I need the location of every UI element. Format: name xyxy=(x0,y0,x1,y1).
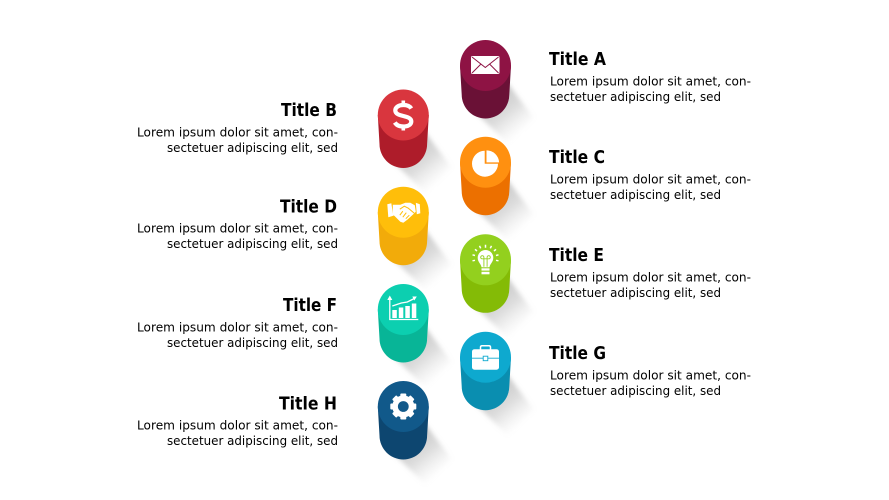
cylinder E: light bulb xyxy=(460,234,534,338)
text block: Title F: sectetuer adipiscing elit, sed xyxy=(167,336,338,351)
icon: pie chart xyxy=(472,150,499,177)
icon: dollar sign xyxy=(395,100,411,130)
icon: handshake xyxy=(387,203,420,223)
text block: Title A xyxy=(549,50,751,105)
text block: Title A: Lorem ipsum dolor sit amet, con- xyxy=(550,74,751,90)
text block: Title D: Lorem ipsum dolor sit amet, con- xyxy=(137,222,338,236)
icon: gear xyxy=(390,394,416,420)
text block: Title H: Title H xyxy=(279,394,337,414)
text block: Title C: sectetuer adipiscing elit, sed xyxy=(550,188,721,203)
text block: Title E xyxy=(549,246,751,301)
text block: Title C xyxy=(549,148,751,203)
text block: Title C: Title C xyxy=(549,148,605,168)
text block: Title E: Title E xyxy=(549,246,604,266)
text block: Title G xyxy=(549,344,751,399)
icon: light bulb xyxy=(472,245,498,274)
text block: Title B: sectetuer adipiscing elit, sed xyxy=(167,141,338,156)
cylinder A: envelope xyxy=(460,40,534,144)
cylinder B: dollar xyxy=(378,90,451,193)
text block: Title F: Title F xyxy=(283,296,337,316)
text block: Title H: sectetuer adipiscing elit, sed xyxy=(167,434,338,449)
text block: Title H xyxy=(137,394,338,449)
icon: growth chart xyxy=(387,296,418,320)
text block: Title G: Title G xyxy=(549,344,606,364)
text block: Title F xyxy=(137,296,338,351)
text block: Title C: Lorem ipsum dolor sit amet, con- xyxy=(550,172,751,188)
icon: envelope xyxy=(471,56,500,74)
text block: Title D xyxy=(137,198,338,252)
cylinder C: pie chart xyxy=(460,137,534,240)
text block: Title B: Title B xyxy=(281,101,337,121)
text block: Title A: sectetuer adipiscing elit, sed xyxy=(550,90,721,105)
cylinder F: bar chart xyxy=(378,284,451,388)
text block: Title A: Title A xyxy=(549,50,606,70)
cylinder H: gear xyxy=(378,381,451,484)
text block: Title B: Lorem ipsum dolor sit amet, con- xyxy=(137,126,338,140)
text block: Title B xyxy=(137,101,338,156)
text block: Title E: Lorem ipsum dolor sit amet, con- xyxy=(550,270,751,286)
text block: Title D: sectetuer adipiscing elit, sed xyxy=(167,237,338,252)
icon: briefcase xyxy=(472,346,499,370)
cylinder G: briefcase xyxy=(460,332,534,435)
text block: Title H: Lorem ipsum dolor sit amet, con- xyxy=(137,418,338,434)
text block: Title G: sectetuer adipiscing elit, sed xyxy=(550,384,721,399)
text block: Title G: Lorem ipsum dolor sit amet, con- xyxy=(550,368,751,384)
cylinder D: handshake xyxy=(378,187,451,290)
text block: Title D: Title D xyxy=(280,198,337,218)
text block: Title E: sectetuer adipiscing elit, sed xyxy=(550,286,721,301)
text block: Title F: Lorem ipsum dolor sit amet, con- xyxy=(137,320,338,336)
